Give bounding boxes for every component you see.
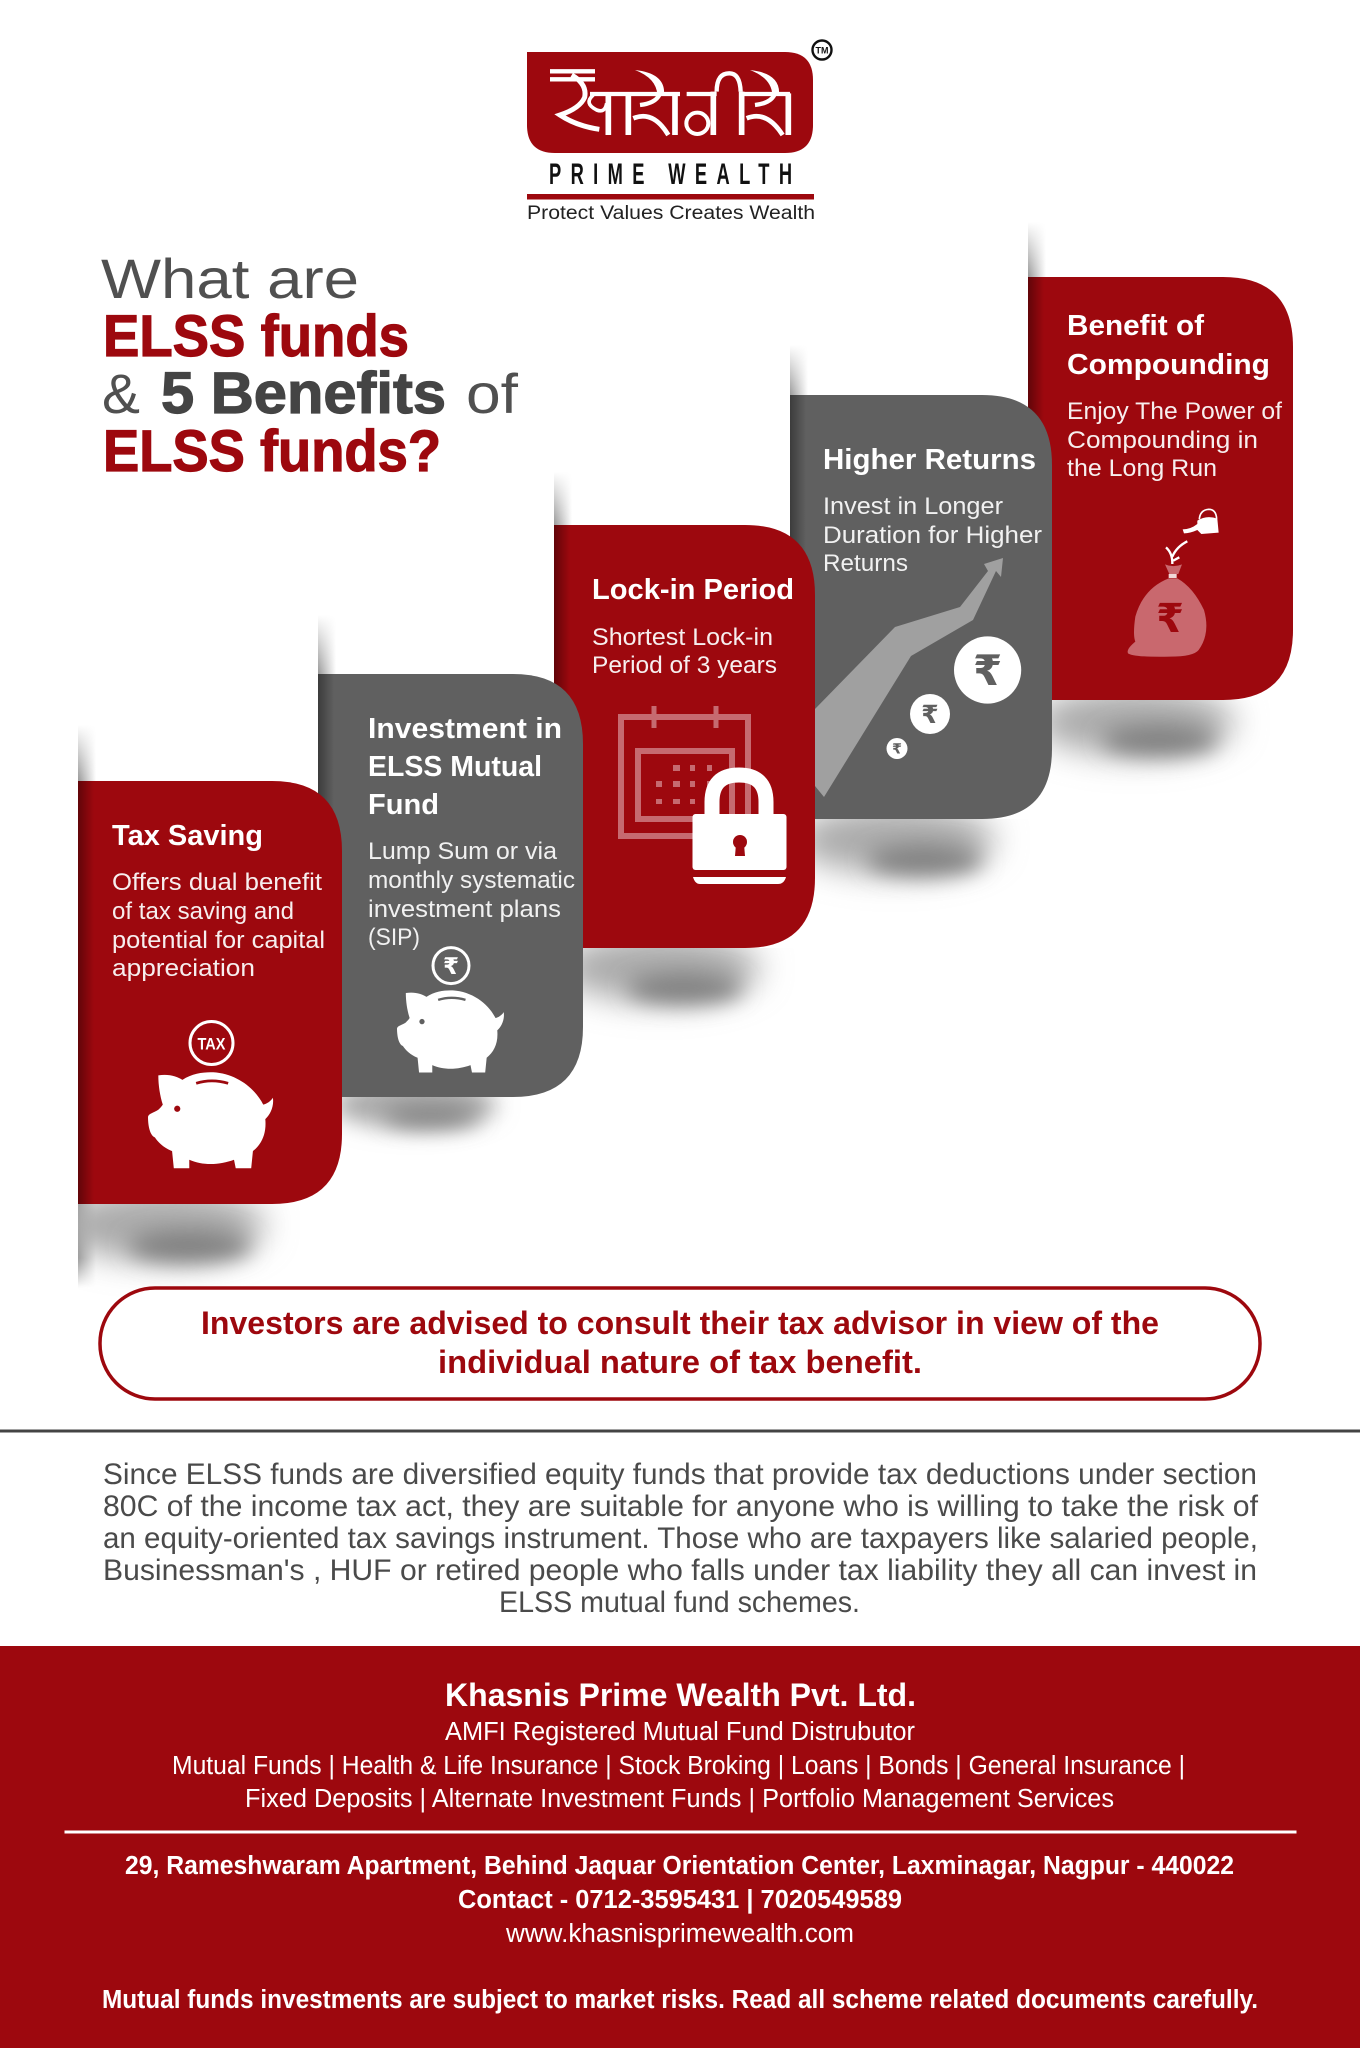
callout: tax advisor note bbox=[100, 1288, 1260, 1399]
callout: tax advisor note: individual nature of tax benefit. bbox=[438, 1344, 922, 1380]
description: (SIP) bbox=[368, 924, 420, 951]
heading bbox=[1067, 310, 1270, 381]
text block: explanation: 80C of the income tax act, they are suitable for anyone who is willing to take the risk of bbox=[103, 1490, 1259, 1523]
description: Shortest Lock-in bbox=[592, 624, 773, 651]
panel: tax saving bbox=[78, 781, 342, 1204]
contact details: 29, Rameshwaram Apartment, Behind Jaquar Orientation Center, Laxminagar, Nagpur - 440022 bbox=[125, 1852, 1234, 1880]
icon: tax coin: TAX bbox=[198, 1034, 226, 1054]
trademark bbox=[812, 40, 832, 60]
description: Returns bbox=[823, 550, 908, 577]
icon: rupee coins bbox=[886, 636, 1021, 759]
description: of tax saving and bbox=[112, 898, 294, 925]
description bbox=[112, 869, 325, 982]
description: Offers dual benefit bbox=[112, 869, 322, 896]
panel: lock-in period bbox=[554, 525, 815, 948]
description: Enjoy The Power of bbox=[1067, 398, 1282, 425]
panel: benefit of compounding bbox=[1028, 277, 1293, 700]
heading: Investment in bbox=[368, 713, 562, 745]
icon: rupee coin: ₹ bbox=[443, 954, 459, 980]
services: Mutual Funds | Health & Life Insurance | Stock Broking | Loans | Bonds | General Insurance | bbox=[172, 1752, 1185, 1780]
description bbox=[823, 493, 1042, 577]
heading: Fund bbox=[368, 789, 439, 821]
icon: padlock bbox=[692, 775, 786, 884]
shadows behind the cards bbox=[55, 222, 1235, 1288]
icon: piggy bank bbox=[148, 1072, 273, 1168]
company name: Khasnis Prime Wealth Pvt. Ltd. bbox=[445, 1677, 916, 1713]
description: Lump Sum or via bbox=[368, 838, 557, 865]
services: AMFI Registered Mutual Fund Distrubutor bbox=[445, 1718, 916, 1746]
title: ELSS funds bbox=[103, 304, 409, 369]
icon: rupee coin bbox=[433, 948, 469, 984]
title: ELSS funds? bbox=[103, 419, 441, 484]
description: Duration for Higher bbox=[823, 522, 1042, 549]
icon: rupee coins: ₹ bbox=[921, 700, 939, 729]
heading: Tax Saving bbox=[112, 820, 263, 852]
description bbox=[1067, 398, 1282, 482]
icon: tax coin bbox=[190, 1022, 233, 1064]
logo badge bbox=[527, 52, 813, 153]
description: potential for capital bbox=[112, 927, 325, 954]
heading: Compounding bbox=[1067, 349, 1270, 381]
panel: investment in ELSS mutual fund bbox=[318, 674, 583, 1097]
heading: Higher Returns bbox=[823, 444, 1036, 476]
text block: explanation: Since ELSS funds are diversified equity funds that provide tax deductions under section bbox=[103, 1458, 1257, 1491]
icon: money bag with sprout and watering can bbox=[1128, 509, 1219, 657]
icon: money bag with sprout and watering can: ₹ bbox=[1156, 596, 1184, 642]
description: Period of 3 years bbox=[592, 652, 777, 679]
disclaimer: Mutual funds investments are subject to market risks. Read all scheme related documents carefully. bbox=[102, 1986, 1258, 2014]
icon: rupee coins: ₹ bbox=[973, 646, 1002, 695]
description bbox=[368, 838, 575, 951]
icon: piggy bank bbox=[397, 990, 504, 1072]
callout: tax advisor note: Investors are advised to consult their tax advisor in view of the bbox=[201, 1305, 1159, 1341]
description bbox=[592, 624, 777, 679]
description: the Long Run bbox=[1067, 455, 1217, 482]
panel: higher returns bbox=[790, 395, 1052, 819]
title: & bbox=[102, 362, 140, 425]
title bbox=[101, 247, 518, 484]
heading: ELSS Mutual bbox=[368, 751, 542, 783]
description: Invest in Longer bbox=[823, 493, 1003, 520]
description: monthly systematic bbox=[368, 867, 575, 894]
contact details bbox=[125, 1852, 1234, 1948]
text block: explanation: Businessman's , HUF or retired people who falls under tax liability they all can invest in bbox=[103, 1554, 1257, 1587]
logo wordmark: PRIME WEALTH bbox=[549, 159, 792, 191]
title: What are bbox=[101, 247, 359, 310]
description: Compounding in bbox=[1067, 427, 1258, 454]
description: appreciation bbox=[112, 955, 255, 982]
footer panel bbox=[0, 1646, 1360, 2048]
logo bbox=[527, 40, 832, 224]
trademark: TM bbox=[816, 46, 828, 56]
icon: rising arrow chart bbox=[815, 558, 1003, 797]
heading: Lock-in Period bbox=[592, 574, 794, 606]
title: of bbox=[466, 362, 518, 425]
services: Fixed Deposits | Alternate Investment Funds | Portfolio Management Services bbox=[245, 1785, 1114, 1813]
heading bbox=[368, 713, 562, 821]
services bbox=[172, 1718, 1185, 1813]
text block: explanation bbox=[103, 1458, 1259, 1619]
text block: explanation: an equity-oriented tax savings instrument. Those who are taxpayers like salaried people, bbox=[103, 1522, 1258, 1555]
title: 5 Benefits bbox=[161, 361, 446, 426]
heading: Benefit of bbox=[1067, 310, 1204, 342]
icon: calendar bbox=[621, 706, 748, 836]
contact details: Contact - 0712-3595431 | 7020549589 bbox=[458, 1886, 902, 1914]
logo tagline: Protect Values Creates Wealth bbox=[527, 203, 815, 224]
icon: rupee coins: ₹ bbox=[892, 742, 902, 758]
contact details: www.khasnisprimewealth.com bbox=[505, 1920, 854, 1948]
text block: explanation: ELSS mutual fund schemes. bbox=[499, 1586, 860, 1619]
description: investment plans bbox=[368, 896, 561, 923]
